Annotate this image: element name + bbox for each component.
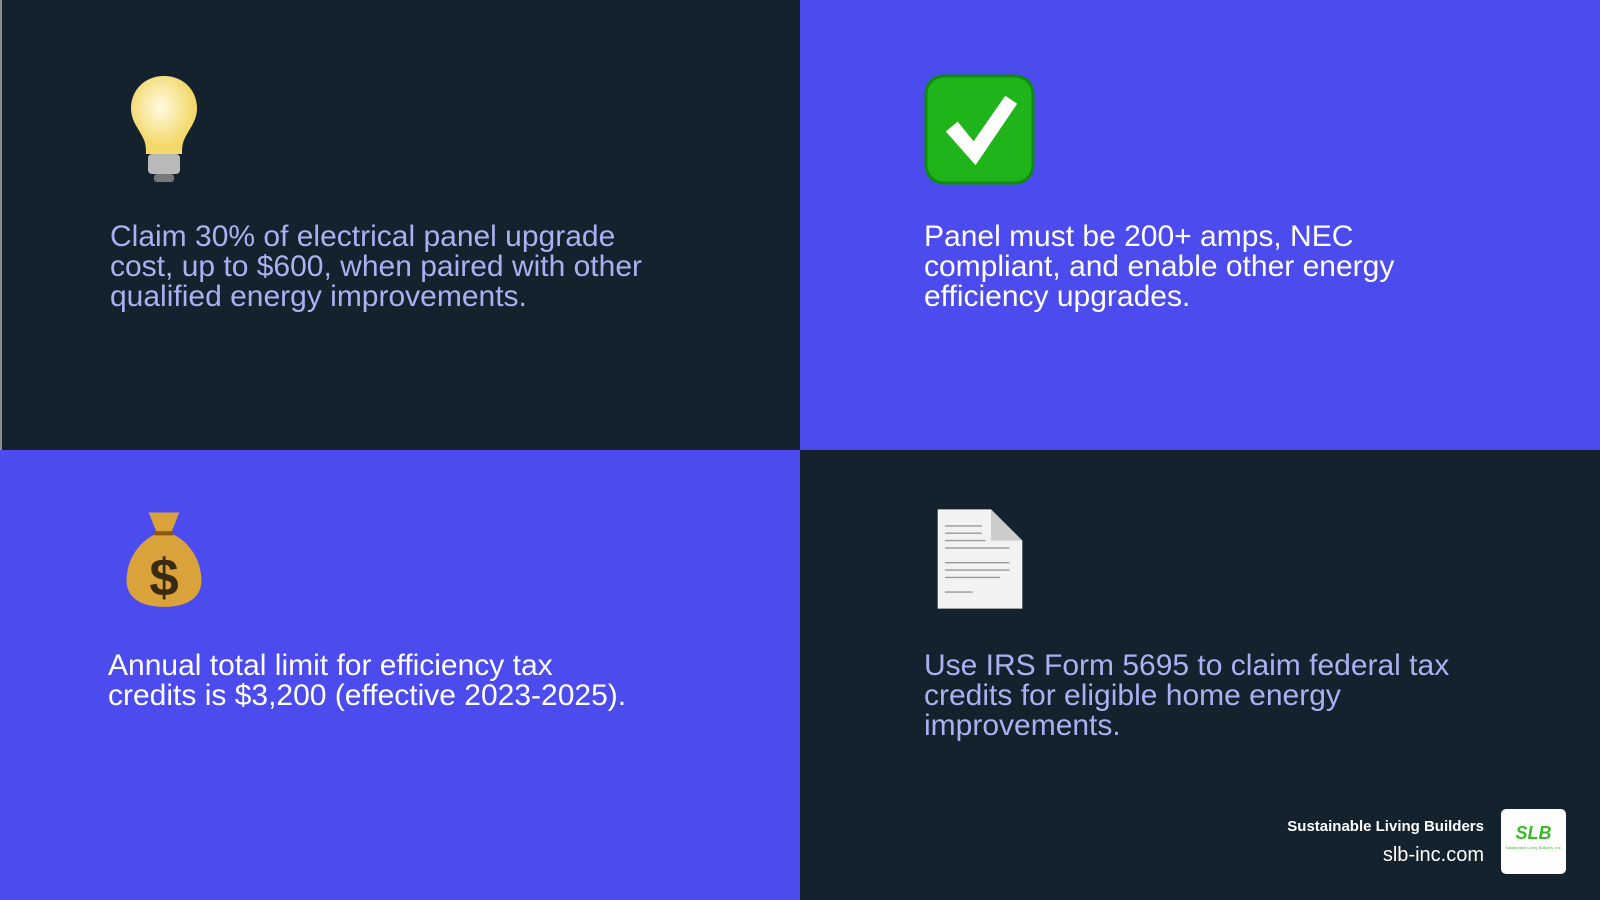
text: IRS form: Use IRS Form 5695 to claim federal tax credits for eligible home energy improvements. [924, 649, 1449, 742]
panel: requirements [800, 0, 1600, 450]
logo: SLB [1516, 823, 1552, 843]
logo [1501, 809, 1566, 874]
logo: Sustainable Living Builders, Inc. [1505, 845, 1562, 850]
brand: website: slb-inc.com [1383, 844, 1484, 866]
icon: document [938, 509, 1023, 609]
text: claim: Claim 30% of electrical panel upgrade cost, up to $600, when paired with other qualified energy improvements. [110, 220, 642, 313]
text: requirements: Panel must be 200+ amps, NEC compliant, and enable other energy efficiency upgrades. [924, 220, 1394, 313]
icon: money bag [126, 512, 202, 608]
panel: IRS form [800, 450, 1600, 900]
panel: annual limit [0, 450, 800, 900]
icon: light bulb [131, 76, 197, 182]
brand: company name: Sustainable Living Builders [1287, 818, 1484, 835]
panel: claim 30% [0, 0, 800, 450]
icon: check mark [924, 74, 1034, 184]
icon: money bag: $ [149, 549, 179, 608]
text: annual limit: Annual total limit for efficiency tax credits is $3,200 (effective 2023-2025). [108, 649, 626, 712]
